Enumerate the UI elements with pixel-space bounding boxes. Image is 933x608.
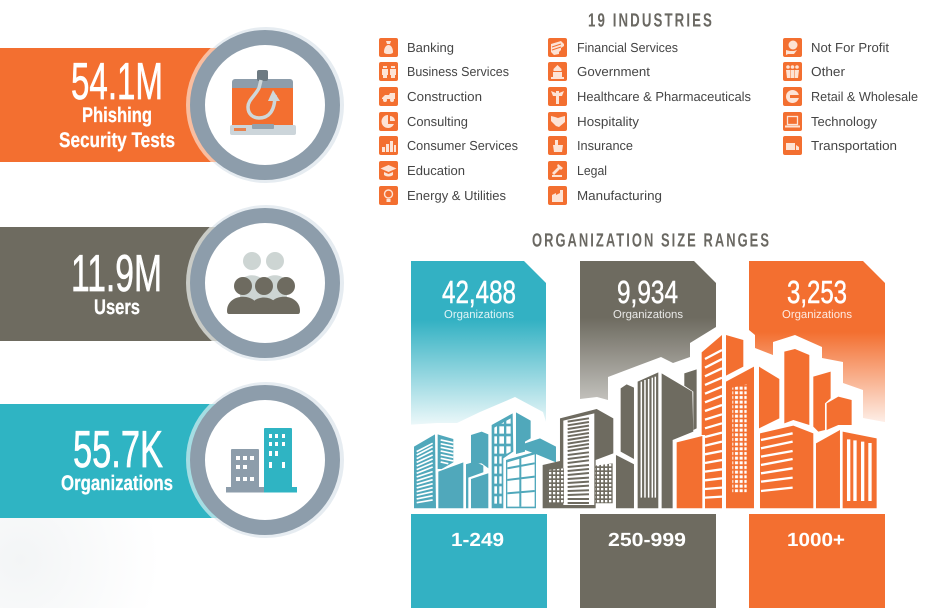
range box: 1-249: 1-249 [451,530,504,551]
range box: 250-999 [580,514,716,608]
industry: Consulting [379,112,468,131]
industry: Business Services: Business Services [407,64,509,79]
industry: Energy & Utilities: Energy & Utilities [407,188,506,203]
industries list [379,38,918,205]
count: 3,253: 3,253 [787,274,847,310]
icon: laptop with hook [230,70,296,135]
industry: Healthcare & Pharmaceuticals: Healthcare & Pharmaceuticals [577,89,751,104]
industry: Government: Government [577,64,650,79]
panel: small organizations [411,261,546,430]
label: organizations: Organizations [782,309,852,321]
industry: Banking [379,38,454,57]
industry: Business Services [379,62,509,81]
illustration: teal buildings [414,412,556,508]
industry: Education: Education [407,163,465,178]
industry: Not For Profit: Not For Profit [811,40,889,55]
industry: Not For Profit [783,38,889,57]
label: phishing security tests [59,104,175,152]
heading: organization size ranges: ORGANIZATION SIZE RANGES [532,230,771,252]
industry: Insurance [548,136,633,155]
industry: Consumer Services: Consumer Services [407,138,518,153]
industry: Manufacturing [548,186,662,205]
industry: Technology [783,112,877,131]
industry: Banking: Banking [407,40,454,55]
industry: Hospitality: Hospitality [577,114,640,129]
label: phishing security tests: Phishing [82,104,152,127]
label: organizations: Organizations [444,309,514,321]
industry: Consumer Services [379,136,518,155]
ring [198,216,332,350]
industry: Financial Services: Financial Services [577,40,678,55]
industry: Manufacturing: Manufacturing [577,188,662,203]
stat banner: users [0,205,344,361]
panel: medium organizations [580,261,716,410]
ring [198,38,332,172]
illustration: grey buildings [543,369,697,508]
ring [198,392,332,528]
industry: Consulting: Consulting [407,114,468,129]
statistic: 54.1M: 54.1M [71,53,163,111]
industry: Government [548,62,650,81]
industry: Education [379,161,465,180]
industry: Legal [548,161,607,180]
label: users: Users [94,296,140,319]
stat banner: phishing security tests [0,27,344,183]
industry: Construction [379,87,482,106]
count: 9,934: 9,934 [617,274,678,310]
heading: 19 industries: 19 INDUSTRIES [588,10,714,32]
range box: 250-999: 250-999 [608,530,686,551]
industry: Other: Other [811,64,846,79]
industry: Financial Services [548,38,678,57]
industry: Other [783,62,846,81]
statistic: 55.7K: 55.7K [73,421,163,479]
industry: Healthcare & Pharmaceuticals [548,87,751,106]
industry: Transportation: Transportation [811,138,897,153]
industry: Retail & Wholesale [783,87,918,106]
icon: office buildings [226,428,297,492]
statistic: 11.9M: 11.9M [71,245,162,303]
label: phishing security tests: Security Tests [59,129,175,152]
stat banner: organizations [0,382,344,538]
label: organizations: Organizations [613,309,683,321]
range box: 1-249 [411,514,547,608]
icon: group of people [227,252,300,314]
industry: Technology: Technology [811,114,877,129]
industry: Legal: Legal [577,163,607,178]
range box: 1000+: 1000+ [787,530,845,551]
industry: Construction: Construction [407,89,482,104]
label: organizations: Organizations [61,472,173,495]
white skyline halo [405,322,890,514]
industry: Transportation [783,136,897,155]
industry: Hospitality [548,112,640,131]
illustration: orange buildings [677,335,877,508]
industry: Energy & Utilities [379,186,506,205]
industry: Insurance: Insurance [577,138,633,153]
industry: Retail & Wholesale: Retail & Wholesale [811,89,918,104]
count: 42,488: 42,488 [442,274,516,310]
panel: large organizations [749,261,885,430]
range box: 1000+ [749,514,885,608]
